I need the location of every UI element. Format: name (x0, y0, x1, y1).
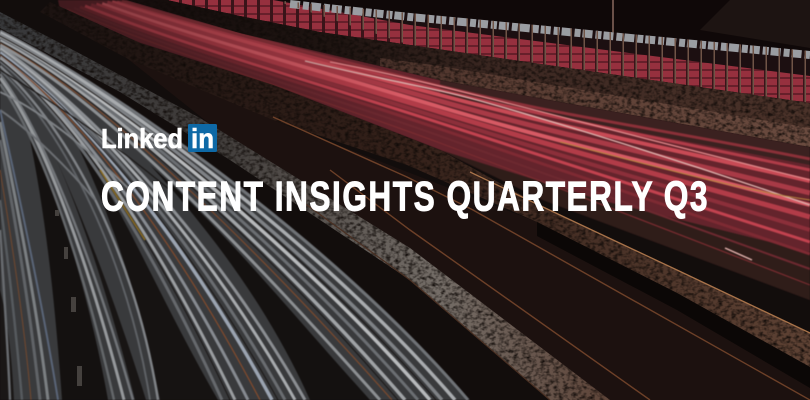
background: night sky and trees (270, 0, 810, 52)
road: lane dash markers (55, 210, 82, 386)
road: white head light streaks (0, 30, 470, 400)
road: concrete median (0, 12, 610, 400)
barrier: concrete wall (127, 0, 810, 147)
barrier: reflective panels (167, 0, 810, 103)
logo badge: in: in (191, 123, 214, 154)
logo wordmark: Linked: Linked (101, 123, 183, 154)
road: orange lane lines (273, 117, 810, 400)
road: red tail light streaks (58, 0, 810, 300)
logo: LinkedIn (101, 123, 217, 154)
